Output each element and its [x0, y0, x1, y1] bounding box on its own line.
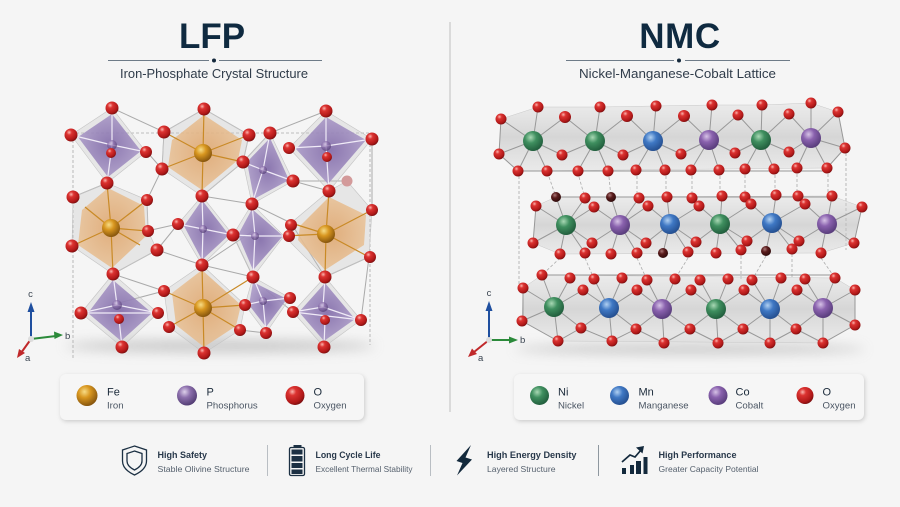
icon: battery: [290, 445, 304, 476]
feature: Long Cycle Life: Excellent Thermal Stability: [316, 464, 413, 474]
title: NMC: NMC: [639, 17, 721, 56]
octahedron: P 5: [233, 204, 284, 277]
oxygen atoms: bottom row: [516, 270, 860, 348]
legend item: Mn: Manganese: [638, 400, 689, 412]
legend item: O: Oxygen: [822, 400, 856, 412]
oxygen atoms: middle row: [528, 190, 868, 260]
legend item: Co: Cobalt: [736, 400, 764, 412]
octahedron: P 7: [245, 277, 290, 333]
axes: LFP: [17, 289, 70, 364]
heading rule: NMC: [566, 58, 790, 62]
axes: NMC: c: [487, 288, 492, 299]
octahedron: P 4: [178, 196, 233, 265]
octahedron: Fe 4: [164, 265, 253, 353]
feature: High Energy Density: Layered Structure: [487, 464, 556, 474]
NMC crystal structure: [494, 98, 868, 354]
axes: LFP: c: [28, 289, 33, 300]
legend: NMC: [514, 374, 865, 422]
feature: High Energy Density: [456, 445, 577, 476]
octahedron: P 3: [289, 111, 372, 191]
legend item: Fe: Iron: [107, 400, 124, 412]
axes: NMC: [468, 288, 525, 364]
icon: lightning bolt: [456, 445, 472, 476]
metal-oxide layer 1: [494, 98, 850, 176]
legend item: Co: [708, 386, 764, 412]
interlayer links: [519, 153, 846, 285]
feature: High Safety: High Safety: [158, 450, 208, 460]
legend item: O: [286, 386, 347, 412]
legend item: Fe: Fe: [107, 386, 120, 398]
metal atoms: bottom row: [544, 297, 833, 319]
octahedron: Fe 2: [72, 183, 157, 274]
centre divider: [449, 22, 451, 412]
legend item: P: Phosphorus: [206, 400, 258, 412]
legend: LFP: [60, 374, 365, 422]
heading rule: LFP: [108, 58, 322, 62]
icon: growth chart: [622, 446, 648, 474]
legend item: O: O: [822, 386, 832, 398]
axes: LFP: a: [25, 353, 31, 364]
legend item: Ni: [530, 386, 584, 412]
metal-oxide layer 2: [528, 190, 868, 260]
octahedron: P 2: [243, 133, 293, 204]
octahedron: P 1: [71, 108, 146, 183]
legend item: Ni: Ni: [558, 386, 568, 398]
legend item: Mn: Mn: [638, 386, 654, 398]
feature: High Energy Density: High Energy Density: [487, 450, 577, 460]
metal-oxide layer 3: [516, 270, 860, 348]
feature: Long Cycle Life: Long Cycle Life: [316, 450, 380, 460]
legend item: Mn: [610, 386, 689, 412]
LFP crystal structure: [64, 102, 378, 360]
axes: NMC: a: [478, 353, 484, 364]
octahedron: P 8: [293, 277, 361, 347]
feature: High Performance: High Performance: [658, 450, 736, 460]
octahedron: Fe 1: [162, 109, 249, 196]
legend item: P: [177, 386, 258, 412]
legend item: O: [796, 386, 856, 412]
legend item: Co: Co: [736, 386, 750, 398]
oxygen atoms: LFP: [64, 102, 378, 360]
octahedron: Fe 3: [284, 181, 372, 277]
title: LFP: LFP: [179, 17, 245, 56]
metal atoms: middle row: [556, 213, 837, 235]
icon: shield: [122, 446, 146, 475]
axes: NMC: b: [520, 335, 525, 346]
feature: High Performance: [622, 446, 759, 474]
legend item: P: P: [206, 386, 214, 398]
metal atoms: top row: [523, 128, 821, 151]
feature: High Performance: Greater Capacity Potential: [658, 464, 759, 474]
feature: Long Cycle Life: [290, 445, 413, 476]
subtitle: NMC: Nickel-Manganese-Cobalt Lattice: [579, 66, 776, 81]
legend item: Fe: [76, 385, 124, 412]
axes: LFP: b: [65, 331, 70, 342]
feature: High Safety: [122, 446, 250, 475]
octahedron: P 6: [81, 274, 158, 347]
subtitle: LFP: Iron-Phosphate Crystal Structure: [120, 66, 308, 81]
legend item: Ni: Nickel: [558, 400, 584, 412]
feature: High Safety: Stable Olivine Structure: [158, 464, 250, 474]
oxygen atoms: top row: [494, 98, 850, 176]
legend item: O: O: [314, 386, 322, 398]
legend item: O: Oxygen: [314, 400, 347, 412]
